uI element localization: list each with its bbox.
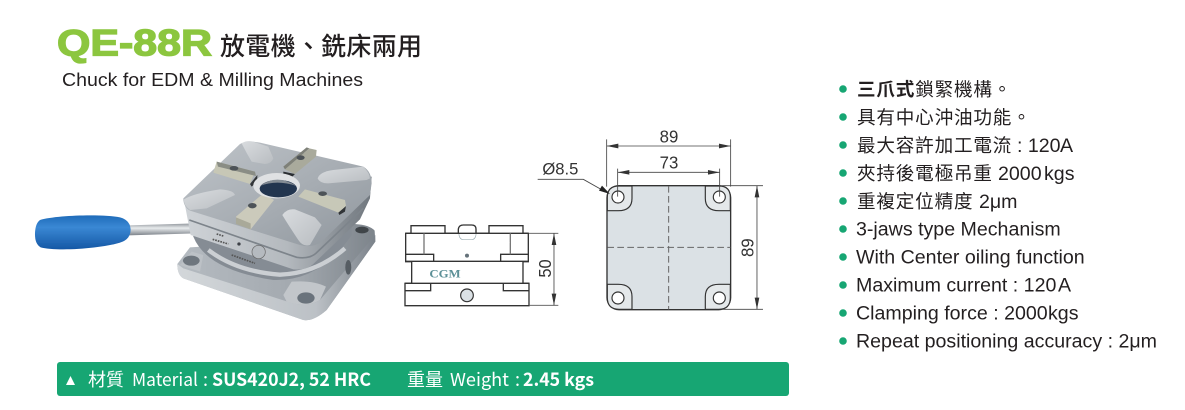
list items english: kgs — [1048, 302, 1079, 324]
list items chinese: 三爪式鎖緊機構。 — [857, 79, 1012, 100]
dimension 50: 50 — [535, 259, 555, 278]
mounting holes — [612, 191, 725, 304]
dimension 89 height: 89 — [737, 238, 757, 257]
list items chinese: : 120 — [1017, 135, 1061, 157]
list items chinese: kgs — [1044, 163, 1075, 185]
hole diameter callout: Ø8.5 — [542, 160, 578, 179]
list items english: Clamping force : 2000 — [856, 302, 1048, 324]
material and weight bar — [57, 362, 789, 396]
list items chinese: 最大容許加工電流 — [857, 135, 1012, 156]
title — [57, 22, 422, 64]
bullets — [839, 85, 847, 345]
list items chinese: 2μm — [979, 191, 1018, 213]
dimension 89 width: 89 — [660, 126, 678, 146]
title: 放電機、銑床兩用 — [220, 27, 422, 63]
CGM mark: CGM — [429, 267, 461, 281]
material colon: : — [203, 366, 208, 392]
dimension 50 — [529, 233, 558, 305]
dimension 73: 73 — [660, 153, 678, 173]
title: QE-88R — [57, 22, 212, 64]
dimension 89 width — [607, 126, 731, 187]
list items chinese: 夾持後電極吊重 — [857, 163, 993, 184]
weight english: Weight — [450, 366, 509, 392]
front view drawing — [405, 225, 558, 306]
corner pads — [607, 186, 730, 309]
base plate — [177, 224, 375, 320]
list items chinese: 2000 — [998, 163, 1042, 185]
top block side — [184, 177, 372, 270]
list items english: Maximum current : 120 — [856, 274, 1056, 296]
list items chinese — [857, 79, 1075, 213]
blue handle — [35, 215, 131, 249]
plate outline — [607, 186, 731, 310]
list items english: 3-jaws type Mechanism — [856, 218, 1061, 240]
rotary body — [193, 225, 352, 280]
jaws — [213, 147, 346, 229]
hole diameter callout — [538, 160, 610, 194]
subtitle: Chuck for EDM & Milling Machines — [62, 70, 363, 90]
list items english: With Center oiling function — [856, 246, 1085, 268]
list items chinese: 重複定位精度 — [857, 191, 973, 212]
center bore — [253, 173, 300, 198]
lever rod — [128, 223, 196, 235]
bottom view drawing — [538, 126, 763, 310]
list items chinese: A — [1060, 135, 1074, 157]
list items english — [856, 218, 1157, 352]
weight value: 2.45 kgs — [523, 366, 594, 392]
list items english: Repeat positioning accuracy : 2μm — [856, 330, 1157, 352]
feature list — [839, 79, 1157, 352]
weight label: 重量 — [407, 366, 443, 392]
weight colon: : — [515, 366, 520, 392]
engraving — [252, 245, 265, 259]
top face — [183, 142, 372, 246]
material value: SUS420J2, 52 HRC — [212, 366, 371, 392]
dimension 89 height — [722, 186, 763, 309]
dimension 73 — [618, 153, 720, 197]
icon: triangle — [66, 376, 75, 385]
list items english: A — [1058, 274, 1072, 296]
list items chinese: 具有中心沖油功能。 — [857, 107, 1032, 128]
material label: 材質 — [88, 366, 124, 392]
product photo: chuck with blue handle — [35, 141, 375, 320]
corner pads — [242, 141, 273, 164]
material english: Material — [132, 366, 198, 392]
